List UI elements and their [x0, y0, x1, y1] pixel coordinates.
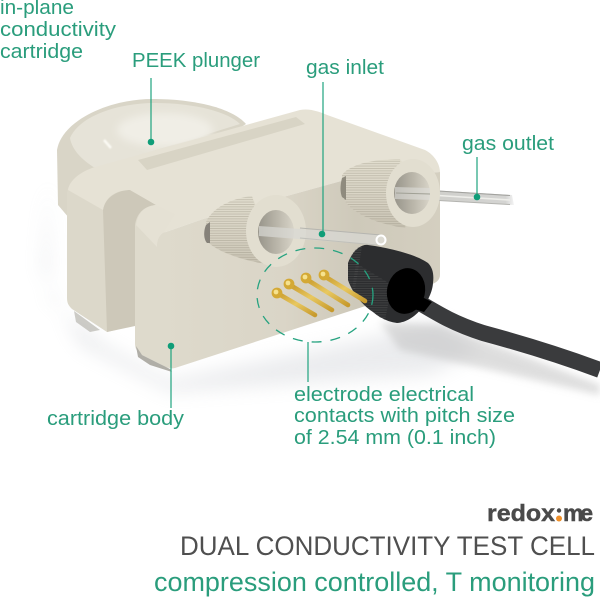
gas outlet tube — [430, 190, 514, 205]
cartridge body: rear block — [67, 167, 156, 332]
label: PEEK plunger: PEEK plunger — [132, 50, 260, 72]
title: DUAL CONDUCTIVITY TEST CELL — [180, 531, 595, 561]
leader line: gas inlet — [319, 82, 325, 237]
leader line: gas outlet — [474, 157, 480, 200]
cartridge body: front block side strip — [135, 205, 170, 368]
gold electrode pins — [272, 270, 365, 315]
label: in-plane conductivity cartridge: conductivity — [0, 19, 116, 41]
cartridge body: top surface — [68, 109, 440, 247]
label: gas outlet: gas outlet — [462, 133, 554, 155]
cartridge body: front face — [157, 172, 440, 368]
drop shadows under cell — [42, 180, 600, 395]
bottom feet shading — [136, 346, 172, 372]
logo: redox.me — [487, 500, 593, 526]
front block rounded shoulder — [136, 205, 175, 247]
label: electrode electrical contacts: of 2.54 mm (0.1 inch) — [294, 427, 496, 449]
leader line: cartridge body — [168, 343, 174, 408]
gas inlet tube — [259, 226, 386, 245]
label: in-plane conductivity cartridge — [0, 0, 116, 63]
label: gas inlet: gas inlet — [306, 57, 384, 79]
knob: gas inlet fitting — [204, 195, 306, 267]
leader line: PEEK plunger — [148, 78, 154, 145]
subtitle: compression controlled, T monitoring — [154, 567, 595, 597]
PEEK plunger housing — [57, 99, 246, 225]
device: conductivity test cell — [57, 99, 600, 372]
logo: redox.me: redox — [487, 500, 555, 526]
label: electrode electrical contacts: electrode electrical — [294, 384, 474, 406]
leader line: electrode contacts — [307, 342, 309, 382]
label: electrode electrical contacts: contacts with pitch size — [294, 405, 515, 427]
inner notch between blocks — [103, 190, 158, 332]
black cable — [420, 303, 600, 370]
knob: gas outlet fitting — [340, 159, 440, 228]
top slot — [138, 117, 305, 170]
black temperature connector — [348, 245, 433, 323]
label: electrode electrical contacts — [294, 384, 515, 449]
logo: redox.me: me — [563, 500, 593, 526]
label: cartridge body: cartridge body — [47, 408, 184, 430]
label: in-plane conductivity cartridge: cartridge — [0, 41, 83, 63]
dashed circle: electrode contacts callout — [257, 248, 373, 342]
